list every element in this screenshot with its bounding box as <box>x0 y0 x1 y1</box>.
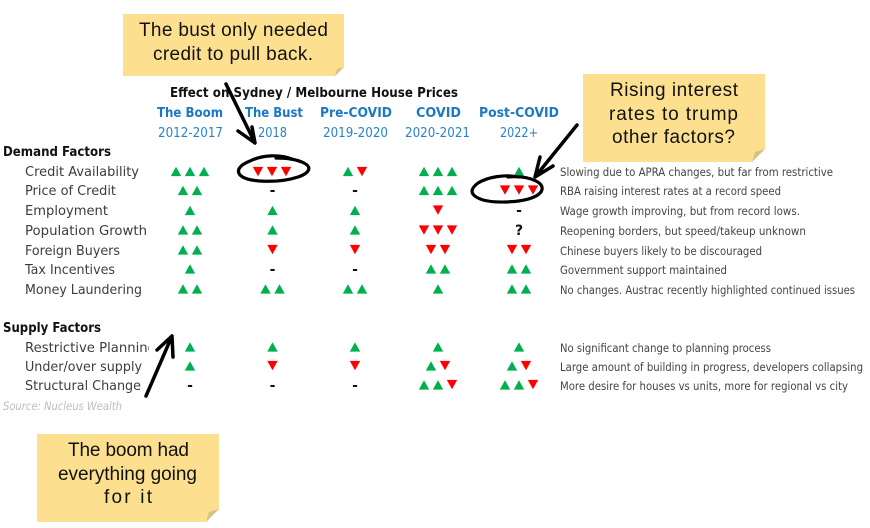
row: Tax Incentives: - <box>270 262 276 278</box>
row: Tax Incentives <box>24 262 727 278</box>
column header: Pre-COVID <box>320 105 392 141</box>
row: Tax Incentives: - <box>352 262 358 278</box>
row: Restrictive Planning: Restrictive Planning <box>25 340 156 356</box>
row: Foreign Buyers: Chinese buyers likely to be discouraged <box>560 244 762 258</box>
row: Price of Credit: - <box>352 183 358 199</box>
column header: COVID: COVID <box>416 105 461 121</box>
row: Structural Change: - <box>352 378 358 394</box>
row: Money Laundering <box>25 282 855 298</box>
arrow: rising rates note to price of credit <box>535 125 577 177</box>
column header: COVID <box>405 105 470 141</box>
row: Money Laundering: Money Laundering <box>25 282 142 298</box>
row: Price of Credit <box>25 183 781 199</box>
row: Price of Credit: Price of Credit <box>25 183 116 199</box>
row: Restrictive Planning: No significant change to planning process <box>560 341 771 355</box>
row: Under/over supply <box>25 359 863 375</box>
column header: The Boom: 2012-2017 <box>158 125 223 141</box>
sticky note: boom: The boom had <box>68 440 189 461</box>
column header: The Bust: 2018 <box>258 125 287 141</box>
sticky note: boom <box>37 434 219 522</box>
row: Tax Incentives: Tax Incentives <box>24 262 115 278</box>
title: Effect on Sydney / Melbourne House Prices <box>170 85 458 101</box>
column headers <box>157 105 559 141</box>
sticky note: bust: The bust only needed <box>139 20 328 41</box>
column header: The Bust: The Bust <box>245 105 303 121</box>
row: Structural Change: - <box>187 378 193 394</box>
column header: The Bust <box>245 105 303 141</box>
arrow: bust note to credit availability <box>226 84 255 143</box>
row: Population Growth: Population Growth <box>25 223 147 239</box>
column header: Post-COVID: 2022+ <box>500 125 538 141</box>
column header: The Boom <box>157 105 223 141</box>
sticky note: rising interest rates: rates to trump <box>609 104 738 125</box>
row: Credit Availability: Slowing due to APRA changes, but far from restrictive <box>560 165 833 179</box>
row: Population Growth <box>25 223 806 239</box>
column header: The Boom: The Boom <box>157 105 223 121</box>
row: Structural Change: - <box>270 378 276 394</box>
row: Structural Change: Structural Change <box>25 378 141 394</box>
sticky note: rising interest rates: other factors? <box>612 127 735 148</box>
column header: Post-COVID <box>479 105 559 141</box>
sticky note: boom: for it <box>104 487 153 508</box>
column header: Pre-COVID: 2019-2020 <box>323 125 388 141</box>
row: Foreign Buyers: Foreign Buyers <box>25 243 120 259</box>
row: Price of Credit: - <box>270 183 276 199</box>
row: Foreign Buyers <box>25 243 762 259</box>
row: Tax Incentives: Government support maintained <box>560 263 727 277</box>
section heading: Demand Factors: Demand Factors <box>3 144 111 160</box>
sticky note: rising interest rates <box>583 74 765 162</box>
row: Population Growth: ? <box>515 223 523 239</box>
sticky note: boom: everything going <box>58 464 197 485</box>
column header: COVID: 2020-2021 <box>405 125 470 141</box>
column header: Pre-COVID: Pre-COVID <box>320 105 392 121</box>
source note: Source: Nucleus Wealth <box>3 399 122 413</box>
sticky note: bust <box>123 14 344 76</box>
sticky note: bust: credit to pull back. <box>153 44 313 65</box>
circle: credit availability in the bust <box>238 156 309 181</box>
row: Employment <box>25 203 800 219</box>
row: Employment: Employment <box>25 203 108 219</box>
sticky note: rising interest rates: Rising interest <box>610 80 739 101</box>
row: Employment: - <box>516 203 522 219</box>
arrow: boom note to table <box>146 336 173 396</box>
column header: Post-COVID: Post-COVID <box>479 105 559 121</box>
row: Employment: Wage growth improving, but from record lows. <box>560 204 800 218</box>
row: Price of Credit: RBA raising interest rates at a record speed <box>560 184 781 198</box>
row: Credit Availability: Credit Availability <box>25 164 139 180</box>
row: Structural Change <box>25 378 848 394</box>
circle: price of credit post-COVID <box>472 176 542 202</box>
row: Credit Availability <box>25 164 833 180</box>
section heading: Supply Factors: Supply Factors <box>3 320 101 336</box>
row: Under/over supply: Under/over supply <box>25 359 142 375</box>
row: Population Growth: Reopening borders, but speed/takeup unknown <box>560 224 806 238</box>
row: Restrictive Planning <box>26 342 770 354</box>
